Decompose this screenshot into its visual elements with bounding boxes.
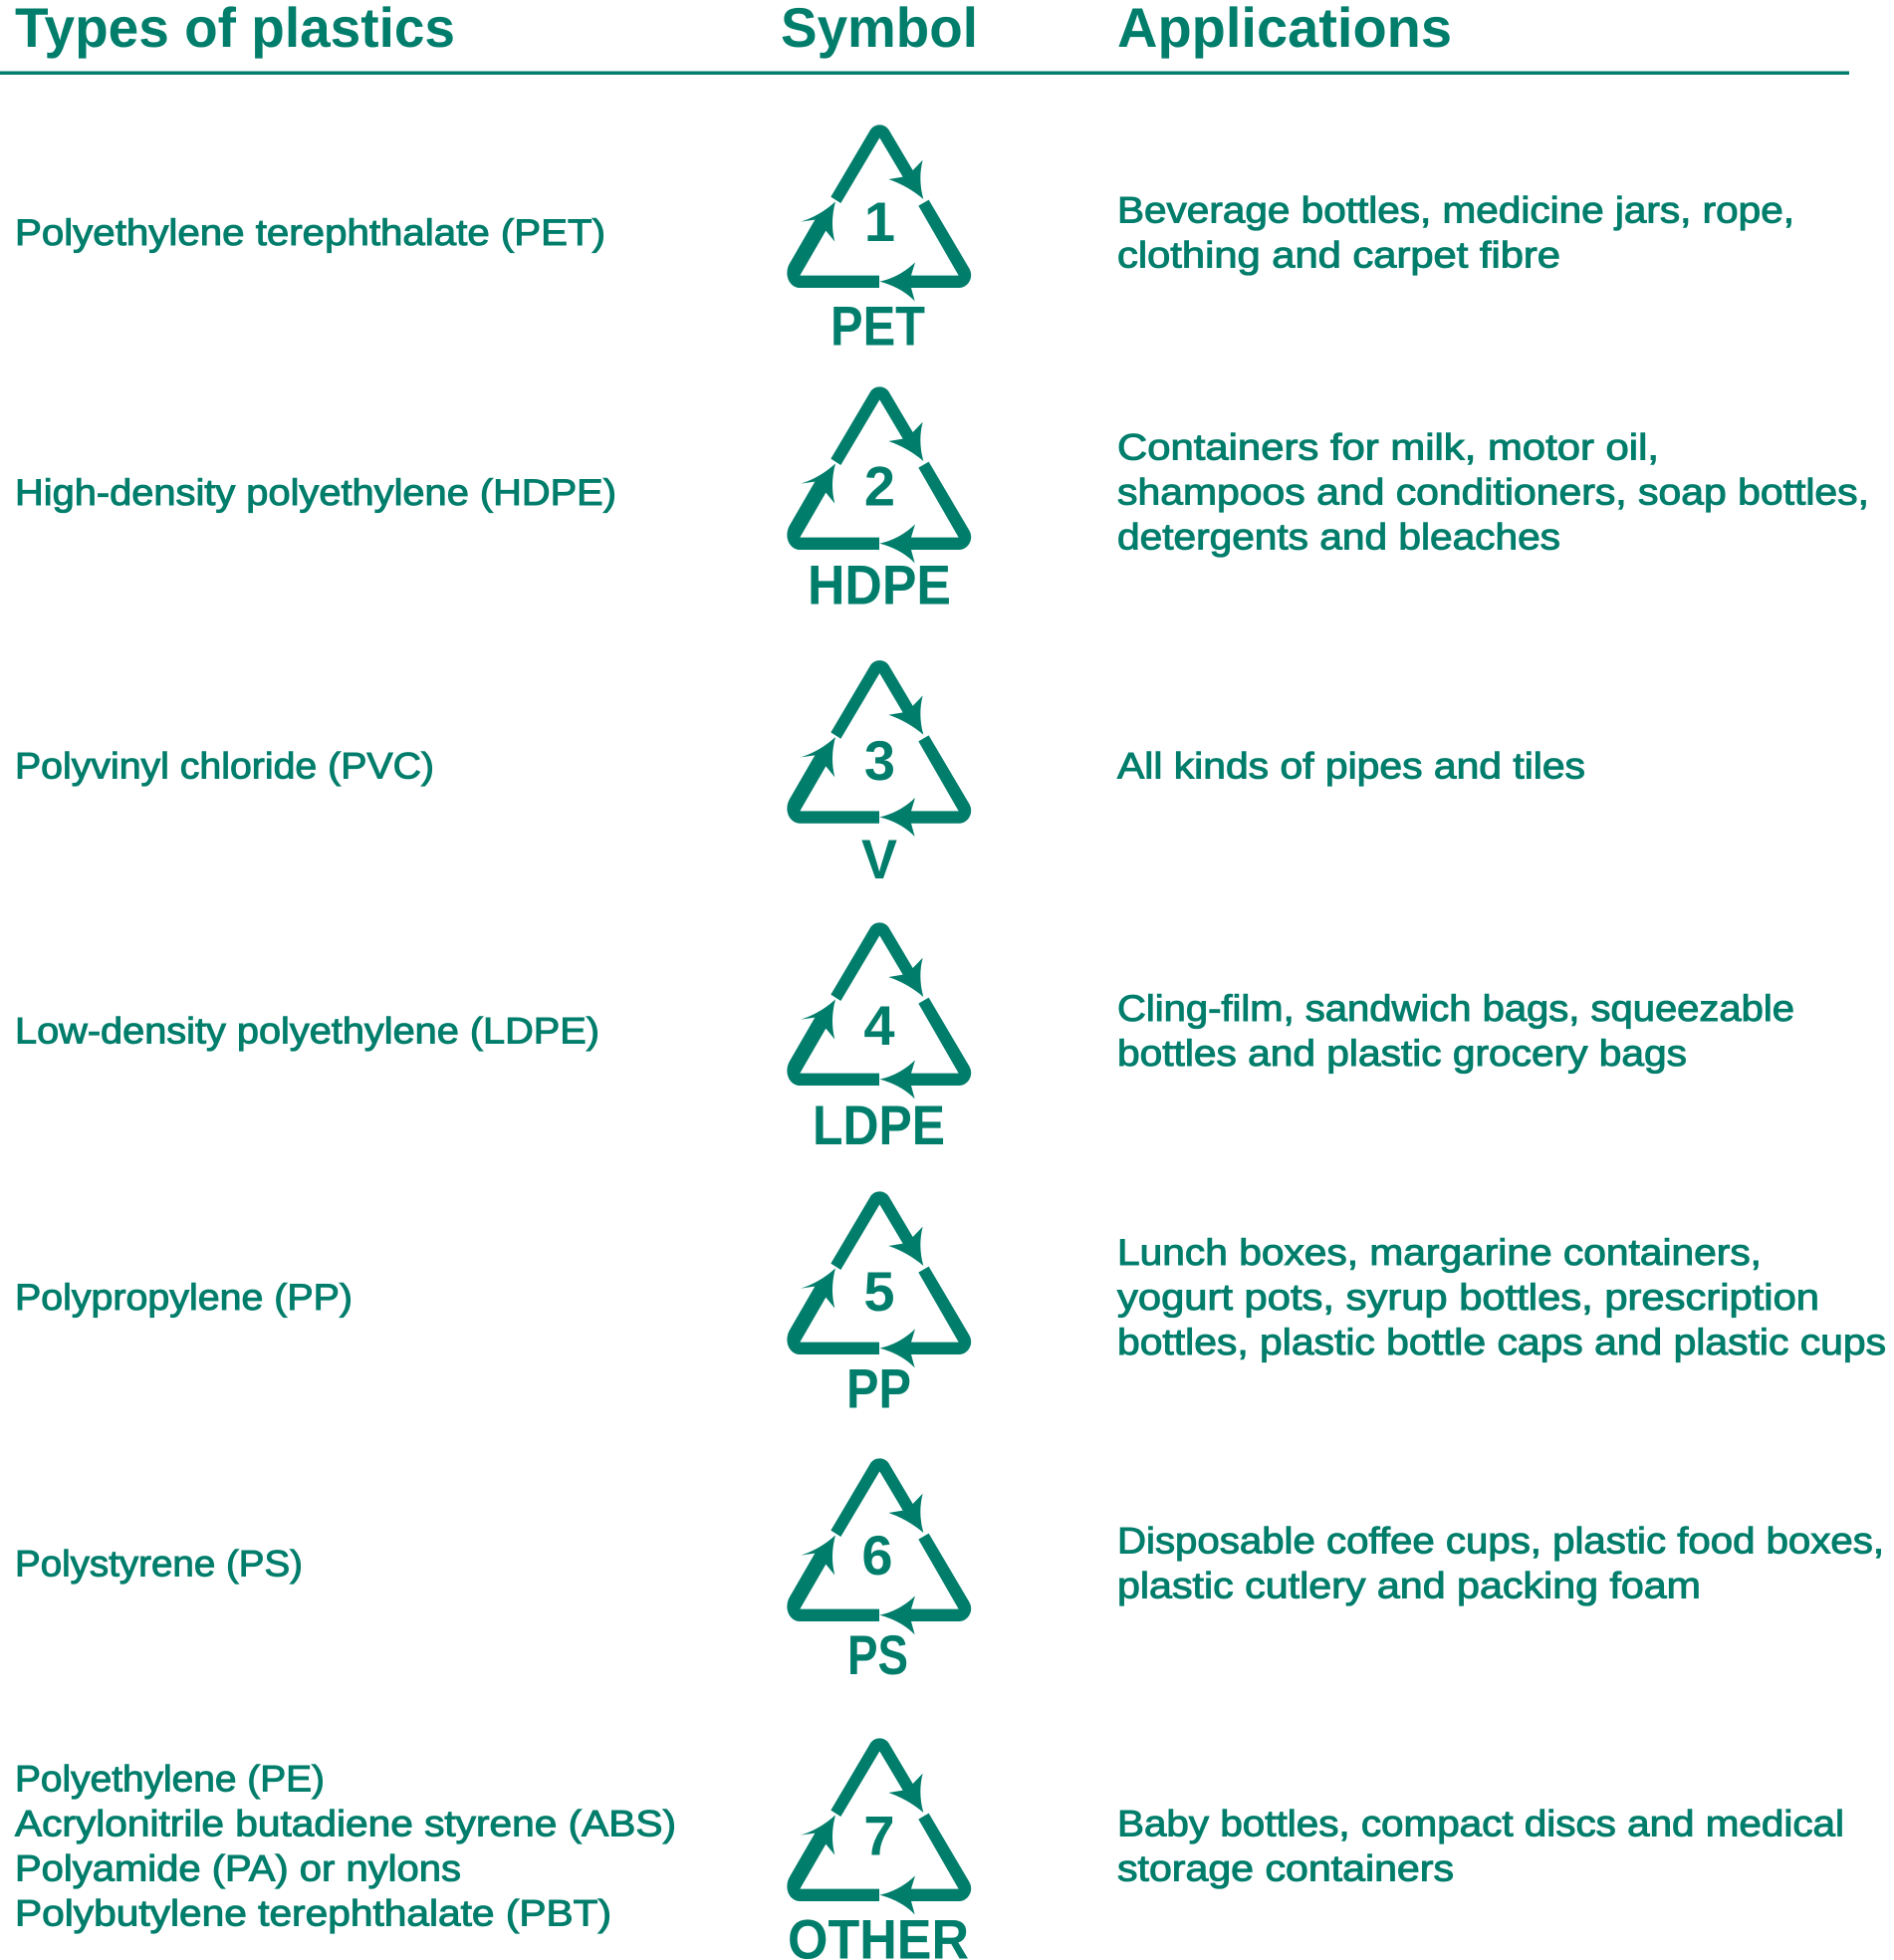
icon: recycling symbol 1 PET: 1 [864, 190, 895, 253]
icon: recycling symbol 5 PP: PP [846, 1356, 911, 1420]
applications: PET: clothing and carpet fibre [1117, 235, 1560, 275]
icon: recycling symbol 6 PS: PS [847, 1623, 908, 1686]
applications: HDPE: detergents and bleaches [1117, 516, 1560, 558]
icon: recycling symbol 2 HDPE [787, 386, 971, 615]
applications: LDPE: bottles and plastic grocery bags [1117, 1033, 1687, 1074]
plastic names: other: Polybutylene terephthalate (PBT) [15, 1892, 611, 1934]
icon: recycling symbol 2 HDPE: HDPE [808, 554, 951, 615]
applications: PVC: All kinds of pipes and tiles [1117, 745, 1585, 787]
applications: other: Baby bottles, compact discs and medical [1117, 1803, 1844, 1844]
plastic name: PS: Polystyrene (PS) [15, 1544, 303, 1584]
applications: PS: Disposable coffee cups, plastic food boxes, [1117, 1520, 1884, 1562]
applications: PP: yogurt pots, syrup bottles, prescription [1117, 1277, 1819, 1318]
applications: other: storage containers [1117, 1848, 1454, 1888]
icon: recycling symbol 4 LDPE [787, 922, 971, 1156]
applications: HDPE: Containers for milk, motor oil, [1117, 426, 1659, 468]
applications: PP: Lunch boxes, margarine containers, [1117, 1232, 1762, 1273]
plastic names: other: Acrylonitrile butadiene styrene (ABS) [15, 1803, 676, 1844]
plastic names: other: Polyethylene (PE) [15, 1759, 325, 1799]
icon: recycling symbol 5 PP [787, 1191, 971, 1420]
row 1: PET [15, 124, 1794, 357]
applications: PS: plastic cutlery and packing foam [1117, 1566, 1701, 1605]
icon: recycling symbol 7 OTHER [787, 1738, 971, 1960]
icon: recycling symbol 5 PP: 5 [863, 1260, 895, 1323]
icon: recycling symbol 3 V: 3 [864, 729, 895, 792]
icon: recycling symbol 6 PS: 6 [861, 1524, 893, 1587]
applications: PP: bottles, plastic bottle caps and plastic cups [1117, 1322, 1886, 1362]
icon: recycling symbol 4 LDPE: 4 [863, 994, 895, 1057]
icon: recycling symbol 6 PS [787, 1458, 971, 1686]
applications: HDPE: shampoos and conditioners, soap bottles, [1117, 472, 1869, 512]
plastic names: other [15, 1759, 676, 1934]
icon: recycling symbol 4 LDPE: LDPE [813, 1094, 945, 1156]
row 6: PS [15, 1458, 1884, 1686]
row 2: HDPE [15, 386, 1869, 615]
icon: recycling symbol 3 V: V [861, 828, 897, 890]
icon: recycling symbol 7 OTHER: 7 [863, 1805, 895, 1866]
plastic name: LDPE: Low-density polyethylene (LDPE) [15, 1010, 599, 1052]
row 7: other [15, 1738, 1844, 1960]
applications: PET: Beverage bottles, medicine jars, rope, [1117, 189, 1794, 231]
applications: other [1117, 1803, 1844, 1888]
row 3: PVC [15, 660, 1585, 890]
applications: PP [1117, 1232, 1886, 1362]
icon: recycling symbol 2 HDPE: 2 [864, 454, 895, 518]
plastic name: PET: Polyethylene terephthalate (PET) [15, 212, 605, 253]
applications: PS [1117, 1520, 1884, 1605]
row 4: LDPE [15, 922, 1794, 1156]
row 5: PP [15, 1191, 1886, 1420]
plastic name: HDPE: High-density polyethylene (HDPE) [15, 472, 616, 513]
plastic names: other: Polyamide (PA) or nylons [15, 1848, 461, 1888]
applications: PET [1117, 189, 1794, 275]
icon: recycling symbol 3 V [787, 660, 971, 890]
plastic name: PVC: Polyvinyl chloride (PVC) [15, 745, 434, 787]
applications: HDPE [1117, 426, 1869, 558]
icon: recycling symbol 1 PET: PET [830, 295, 925, 357]
applications: LDPE: Cling-film, sandwich bags, squeezable [1117, 988, 1794, 1029]
applications: LDPE [1117, 988, 1794, 1074]
plastic name: PP: Polypropylene (PP) [15, 1277, 353, 1318]
icon: recycling symbol 1 PET [787, 124, 971, 357]
